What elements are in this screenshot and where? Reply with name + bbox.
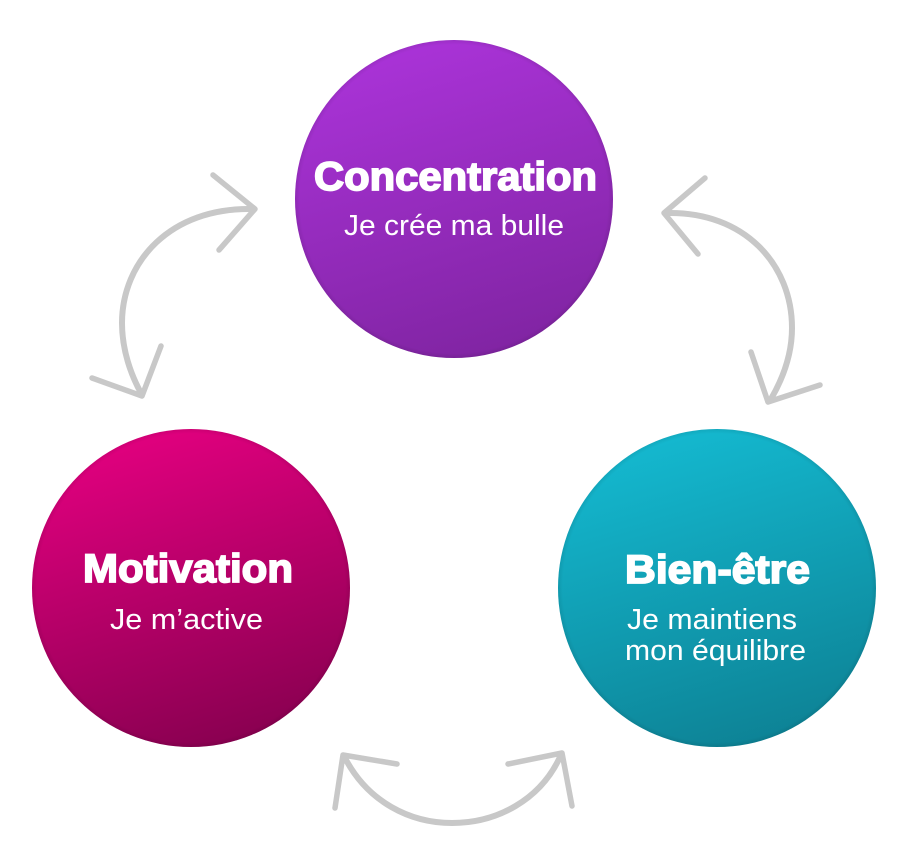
heading: Bien-être: Bien-être xyxy=(625,548,810,592)
text: Je maintiens mon équilibre: mon équilibre xyxy=(625,635,806,667)
text: Je maintiens mon équilibre: Je maintiens xyxy=(627,604,797,636)
text: Je m'active: Je m’active xyxy=(110,604,263,636)
panel: Bien-être circle xyxy=(558,429,876,747)
arrow: Motivation to Bien-être xyxy=(335,753,572,823)
text: Je maintiens mon équilibre xyxy=(625,604,806,667)
arrow: Concentration to Motivation xyxy=(92,175,255,396)
arrow: Concentration to Bien-être xyxy=(664,178,820,402)
text: Je crée ma bulle: Je crée ma bulle xyxy=(344,210,564,242)
heading: Motivation: Motivation xyxy=(83,547,293,591)
panel: Concentration circle xyxy=(295,40,613,358)
heading: Concentration: Concentration xyxy=(314,155,597,199)
panel: Motivation circle xyxy=(32,429,350,747)
